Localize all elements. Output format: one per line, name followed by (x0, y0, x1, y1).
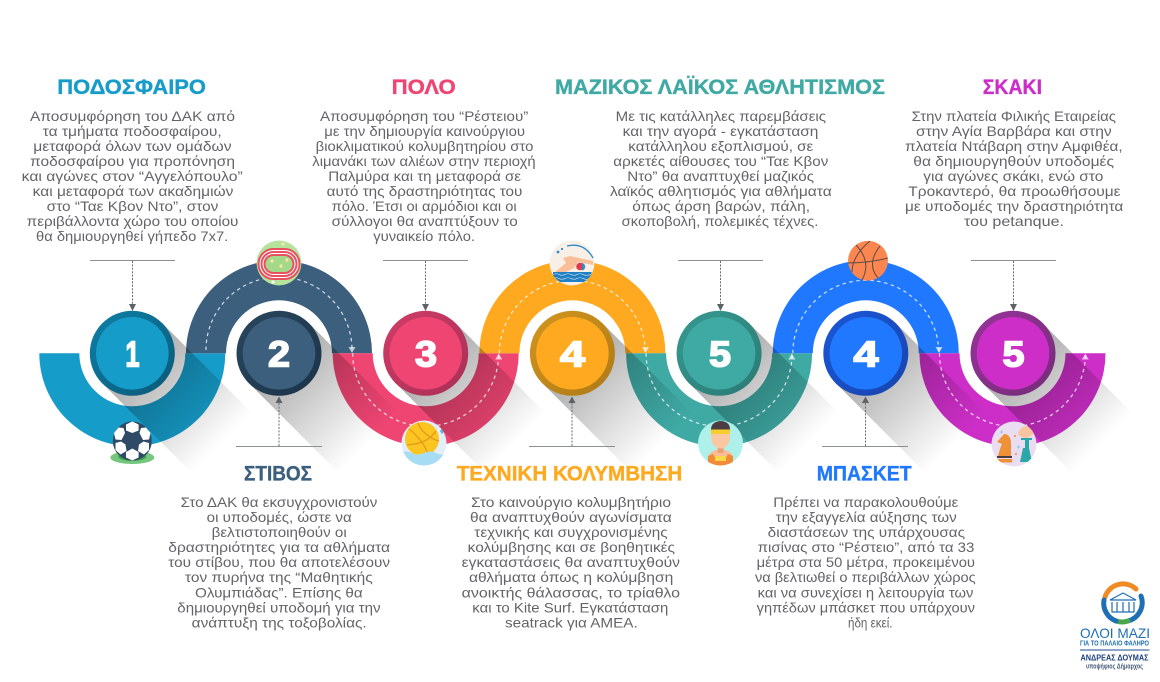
text block: basketball: μέτρα στα 50 μέτρα, προκειμένου (757, 554, 975, 570)
heading: track and field: ΣΤΙΒΟΣ (244, 462, 312, 486)
icon: soccer ball (110, 422, 154, 464)
number badge 3 (383, 311, 468, 396)
number badge 2: 2 (268, 334, 290, 374)
text block: chess: στην Αγία Βαρβάρα και στην (916, 123, 1112, 139)
text block: mass sports: όπως άρση βαρών, πάλη, (632, 198, 810, 214)
number badge 4 (basketball): 4 (854, 334, 878, 374)
text block: mass sports: σκοποβολή, πολεμικές τέχνες. (622, 213, 818, 229)
icon: water polo ball (402, 420, 446, 466)
text block: basketball: πισίνας στο “Ρέστειο”, από τα 33 (758, 539, 975, 555)
icon: athlete (698, 420, 743, 470)
connector: step 6 (822, 396, 908, 446)
number badge 5 (chess) (970, 311, 1056, 396)
text block: chess: του petanque. (964, 213, 1064, 229)
text block: basketball: ήδη εκεί. (848, 614, 892, 630)
text block: track and field: Στο ΔΑΚ θα εκσυγχρονιστούν (181, 494, 377, 510)
icon: chess pieces (992, 422, 1041, 466)
text block: track and field: ανάπτυξη της τοξοβολίας. (192, 614, 367, 630)
text block: football: περιβάλλοντα χώρο του οποίου (27, 213, 238, 229)
number badge 1: 1 (126, 334, 140, 374)
heading: water polo: ΠΟΛΟ (392, 76, 456, 99)
text block: track and field: οι υποδομές, ώστε να (207, 509, 352, 525)
text block: mass sports: Με τις κατάλληλες παρεμβάσεις (616, 108, 826, 124)
number badge 1 (90, 311, 175, 396)
logo candidate role: υποψήφιος Δήμαρχος (1086, 664, 1143, 670)
text block: football: και μεταφορά των ακαδημιών (33, 183, 233, 199)
text block: artistic swimming: κολύμβησης και σε βοηθητικές (468, 539, 675, 555)
text block: track and field: Ολυμπιάδας”. Επίσης θα (195, 584, 363, 600)
icon: basketball (848, 241, 888, 281)
text block: mass sports: Ντο” θα αναπτυχθεί μαζικός (627, 168, 814, 184)
icon: running track (256, 240, 302, 286)
text block: chess: πλατεία Ντάβαρη στην Αμφιθέα, (905, 138, 1123, 154)
text block: mass sports: λαϊκός αθλητισμός για αθλήματα (610, 183, 832, 199)
text block: basketball: την εξαγγελία αύξησης των (776, 509, 957, 525)
text block: football: τα τμήματα ποδοσφαίρου, (43, 123, 222, 139)
text block: water polo: πόλο. Έτσι οι αρμόδιοι και οι (332, 198, 517, 214)
text block: water polo: σύλλογοι θα αναπτύξουν το (332, 213, 518, 229)
text block: football: ποδοσφαίρου για προπόνηση (30, 153, 235, 169)
text block: track and field: τον πυρήνα της “Μαθητικής (185, 569, 373, 585)
connector: step 4 (529, 396, 615, 446)
text block: artistic swimming (462, 494, 680, 630)
text block: artistic swimming: εγκαταστάσεις θα αναπτυχθούν (462, 554, 680, 570)
icon: swimmer (550, 240, 594, 286)
text block: mass sports: κατάλληλου εξοπλισμού, σε (628, 138, 813, 154)
number badge 5: 5 (709, 334, 731, 374)
text block: water polo: γυναικείο πόλο. (373, 228, 475, 244)
number badge 3: 3 (415, 334, 437, 374)
text block: artistic swimming: seatrack για ΑΜΕΑ. (505, 614, 638, 630)
text block: basketball: και να συνεχίσει η λειτουργία των (758, 584, 973, 600)
text block: basketball (755, 494, 976, 630)
logo ring (1104, 584, 1142, 622)
logo house (1110, 593, 1136, 612)
connector: step 5 (678, 260, 763, 311)
connector: step 3 (383, 260, 468, 311)
text block: basketball: Πρέπει να παρακολουθούμε (773, 494, 958, 510)
heading: football: ΠΟΔΟΣΦΑΙΡΟ (57, 76, 206, 99)
connector: step 2 (236, 396, 322, 446)
heading: mass sports: ΜΑΖΙΚΟΣ ΛΑΪΚΟΣ ΑΘΛΗΤΙΣΜΟΣ (555, 76, 885, 99)
text block: football: θα δημιουργηθεί γήπεδο 7x7. (36, 228, 228, 244)
heading: basketball: ΜΠΑΣΚΕΤ (817, 462, 912, 486)
text block: artistic swimming: και το Kite Surf. Εγκατάσταση (472, 600, 668, 616)
text block: chess: θα δημιουργηθούν υποδομές (913, 153, 1114, 169)
number badge 4: 4 (560, 334, 585, 374)
text block: football: Αποσυμφόρηση του ΔΑΚ από (30, 108, 235, 124)
text block: football: και αγώνες στον “Αγγελόπουλο” (22, 168, 243, 184)
text block: artistic swimming: αθλήματα όπως η κολύμβηση (469, 569, 673, 585)
heading: artistic swimming: ΤΕΧΝΙΚΗ ΚΟΛΥΜΒΗΣΗ (457, 462, 682, 486)
text block: water polo: Παλμύρα και τη μεταφορά σε (328, 168, 521, 184)
text block: track and field: βελτιστοποιηθούν οι (212, 524, 347, 540)
text block: mass sports: αρκετές αίθουσες του “Ταε Κβον (613, 153, 828, 169)
text block: chess (905, 108, 1123, 229)
text block: water polo: Αποσυμφόρηση του “Ρέστειου” (320, 108, 529, 124)
winding ribbon bands (39, 260, 1105, 446)
text block: chess: Στην πλατεία Φιλικής Εταιρείας (912, 108, 1116, 124)
dashed route with arrows (206, 277, 1089, 426)
logo slogan: ΟΛΟΙ ΜΑΖΙ (1080, 625, 1150, 641)
text block: track and field: του στίβου, που θα αποτελέσουν (168, 554, 390, 570)
text block: water polo: με την δημιουργία καινούργιου (324, 123, 525, 139)
text block: football (22, 108, 243, 244)
text block: football: μεταφορά όλων των ομάδων (33, 138, 232, 154)
text block: football: στο “Ταε Κβον Ντο”, στον (47, 198, 218, 214)
text block: basketball: διαστάσεων της υπάρχουσας (768, 524, 965, 540)
text block: artistic swimming: τεχνικής και συγχρονισμένης (474, 524, 668, 540)
text block: water polo (312, 108, 536, 244)
number badge 5 (677, 311, 762, 396)
text block: chess: με υποδομές την δραστηριότητα (905, 198, 1123, 214)
text block: chess: για αγώνες σκάκι, ενώ στο (923, 168, 1104, 184)
text block: mass sports (610, 108, 832, 229)
number badge 5 (chess): 5 (1002, 334, 1024, 374)
text block: track and field: δημιουργηθεί υποδομή για την (177, 600, 381, 616)
number badge 2 (236, 311, 322, 396)
text block: basketball: να βελτιωθεί ο περιβάλλων χώρος (755, 569, 976, 585)
text block: artistic swimming: ανοικτής θάλασσας, το τρίαθλο (462, 584, 680, 600)
long circle shadows (102, 323, 1132, 473)
text block: track and field (168, 494, 390, 630)
text block: mass sports: και την αγορά - εγκατάσταση (623, 123, 818, 139)
text block: water polo: βιοκλιματικού κολυμβητηρίου στο (316, 138, 534, 154)
text block: water polo: αυτό της δραστηριότητας του (327, 183, 522, 199)
text block: water polo: λιμανάκι των αλιέων στην περιοχή (312, 153, 536, 169)
number badge 4 (basketball) (823, 311, 908, 396)
text block: basketball: γηπέδων μπάσκετ που υπάρχουν (757, 600, 975, 616)
text block: track and field: δραστηριότητες για τα αθλήματα (168, 539, 390, 555)
logo: campaign mark (1080, 584, 1150, 670)
logo candidate name: ΑΝΔΡΕΑΣ ΔΟΥΜΑΣ (1080, 654, 1149, 662)
text block: artistic swimming: θα αναπτυχθούν αγωνίσματα (470, 509, 672, 525)
number badge 4 (530, 311, 615, 396)
text block: artistic swimming: Στο καινούργιο κολυμβητήριο (471, 494, 671, 510)
heading: chess: ΣΚΑΚΙ (983, 76, 1042, 99)
text block: chess: Τροκαντερό, θα προωθήσουμε (908, 183, 1121, 199)
connector: step 7 (971, 260, 1056, 311)
connector: step 1 (90, 260, 175, 311)
